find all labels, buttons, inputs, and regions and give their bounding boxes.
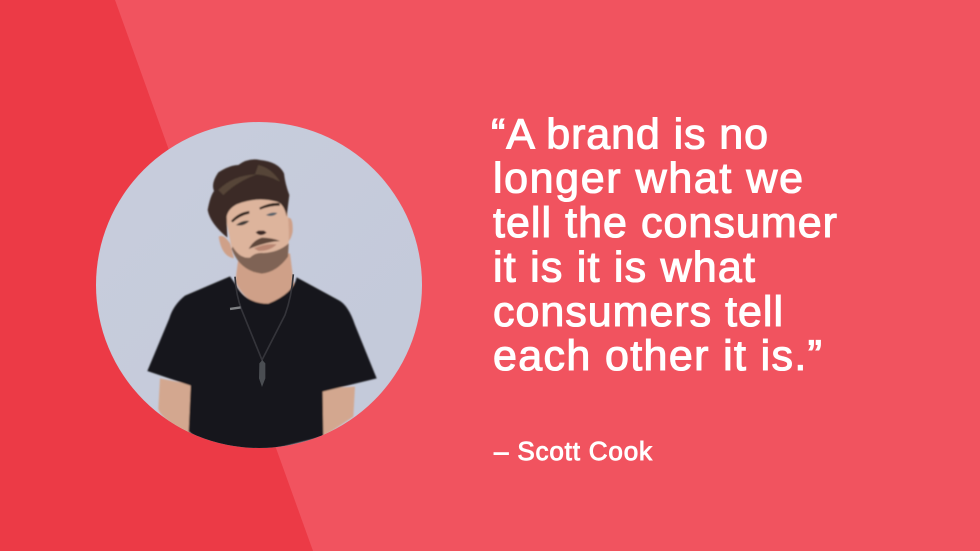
quote text: consumers tell bbox=[493, 288, 783, 336]
lips bbox=[254, 244, 277, 251]
quote text: it is it is what bbox=[493, 244, 755, 292]
face bbox=[226, 198, 290, 258]
arms bbox=[158, 378, 355, 437]
moustache bbox=[249, 238, 280, 249]
portrait photo of Scott Cook in a circle bbox=[96, 122, 422, 452]
quote text: tell the consumer bbox=[493, 199, 837, 247]
pendant bbox=[259, 360, 265, 387]
beard bbox=[232, 243, 289, 274]
ears bbox=[219, 236, 234, 258]
black t-shirt bbox=[147, 276, 377, 452]
quote text: longer what we bbox=[493, 154, 803, 202]
neck bbox=[235, 253, 294, 304]
quote text: each other it is.” bbox=[493, 332, 822, 380]
eyebrows bbox=[231, 211, 249, 222]
shirt label bbox=[230, 306, 241, 310]
hair highlights bbox=[218, 165, 280, 195]
dark red diagonal band bbox=[0, 0, 313, 551]
eyes bbox=[236, 221, 249, 225]
quote text bbox=[491, 110, 837, 380]
hair bbox=[208, 159, 289, 238]
nose shadow bbox=[256, 231, 267, 235]
attribution: – Scott Cook bbox=[494, 436, 653, 466]
necklace bbox=[235, 274, 293, 360]
quote text: “A brand is no bbox=[491, 110, 768, 158]
